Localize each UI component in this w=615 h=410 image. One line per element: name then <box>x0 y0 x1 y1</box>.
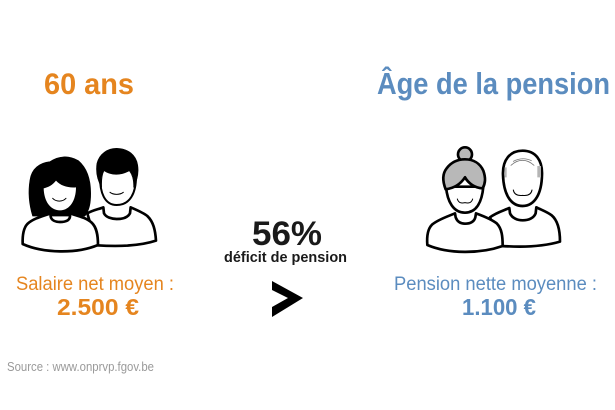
woman neck <box>51 210 70 216</box>
stat: 56%: 56% <box>252 215 322 253</box>
woman body <box>427 213 503 252</box>
man body <box>87 207 156 246</box>
man smile <box>513 190 532 195</box>
label: pension: Pension nette moyenne : <box>394 274 597 295</box>
woman hair bun <box>458 147 472 161</box>
woman smile <box>53 198 66 201</box>
woman body <box>23 213 98 251</box>
man side hair <box>505 166 541 177</box>
woman head <box>446 187 483 213</box>
man smile <box>110 192 123 194</box>
source: Source : www.onprvp.fgov.be <box>7 360 154 374</box>
icon: young couple <box>23 148 156 251</box>
man hair <box>97 148 138 187</box>
heading: 60 ans: 60 ans <box>44 68 134 101</box>
icon: greater-than arrow <box>272 281 303 317</box>
woman face <box>44 181 76 210</box>
woman hair <box>443 159 485 189</box>
man head <box>100 165 136 205</box>
woman smile <box>457 199 473 203</box>
man head <box>503 151 542 206</box>
label: deficit de pension: déficit de pension <box>224 249 347 266</box>
icon: elderly couple <box>427 147 560 252</box>
value: 1.100 euros: 1.100 € <box>462 294 536 320</box>
man body <box>490 207 560 247</box>
man forehead lines <box>511 159 534 165</box>
woman hair <box>29 157 91 216</box>
label: salaire: Salaire net moyen : <box>16 274 174 295</box>
value: 2.500 euros: 2.500 € <box>57 294 139 320</box>
